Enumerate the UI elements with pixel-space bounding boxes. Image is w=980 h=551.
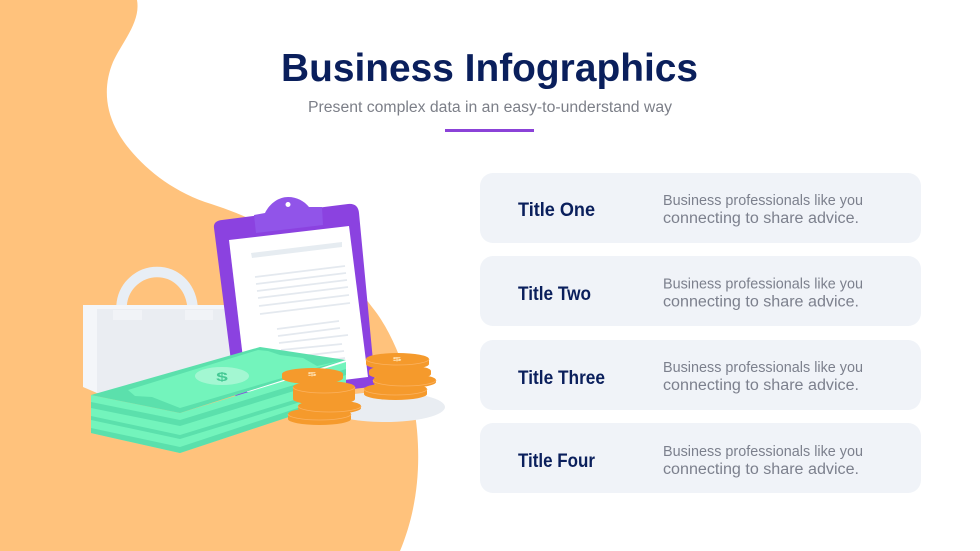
description: title four: connecting to share advice. [663, 461, 859, 478]
description: title two [663, 276, 863, 310]
icon: stack of money: $ [216, 371, 228, 384]
description: title two: connecting to share advice. [663, 294, 859, 310]
heading: title two: Title Two [518, 284, 591, 305]
shadow under coins [325, 392, 445, 422]
icon: stack of money [91, 347, 346, 453]
description: title one: Business professionals like you [663, 192, 863, 209]
description: title three: Business professionals like you [663, 359, 863, 376]
description: title two: Business professionals like you [663, 276, 863, 292]
title underline [445, 129, 534, 132]
subtitle: Present complex data in an easy-to-understand way [308, 99, 672, 116]
icon: left coin stack [282, 368, 361, 425]
illustration: bag, clipboard, money and coins [83, 197, 445, 453]
description: title one [663, 192, 863, 227]
icon: shopping bag [83, 272, 233, 393]
description: title three [663, 359, 863, 394]
description: title four [663, 443, 863, 478]
icon: left coin stack: $ [308, 371, 317, 377]
description: title three: connecting to share advice. [663, 377, 859, 394]
heading: title three: Title Three [518, 368, 605, 389]
icon: right coin stack [364, 353, 436, 400]
heading: title four: Title Four [518, 451, 596, 472]
background orange blob [0, 0, 418, 551]
icon: clipboard [214, 197, 375, 401]
description: title one: connecting to share advice. [663, 210, 859, 227]
panel: title two [480, 256, 921, 326]
panel: title three [480, 340, 921, 410]
panel: title one [480, 173, 921, 243]
heading: title one: Title One [518, 200, 595, 221]
description: title four: Business professionals like you [663, 443, 863, 460]
title: Business Infographics [281, 47, 698, 90]
icon: right coin stack: $ [393, 356, 402, 362]
panel: title four [480, 423, 921, 493]
